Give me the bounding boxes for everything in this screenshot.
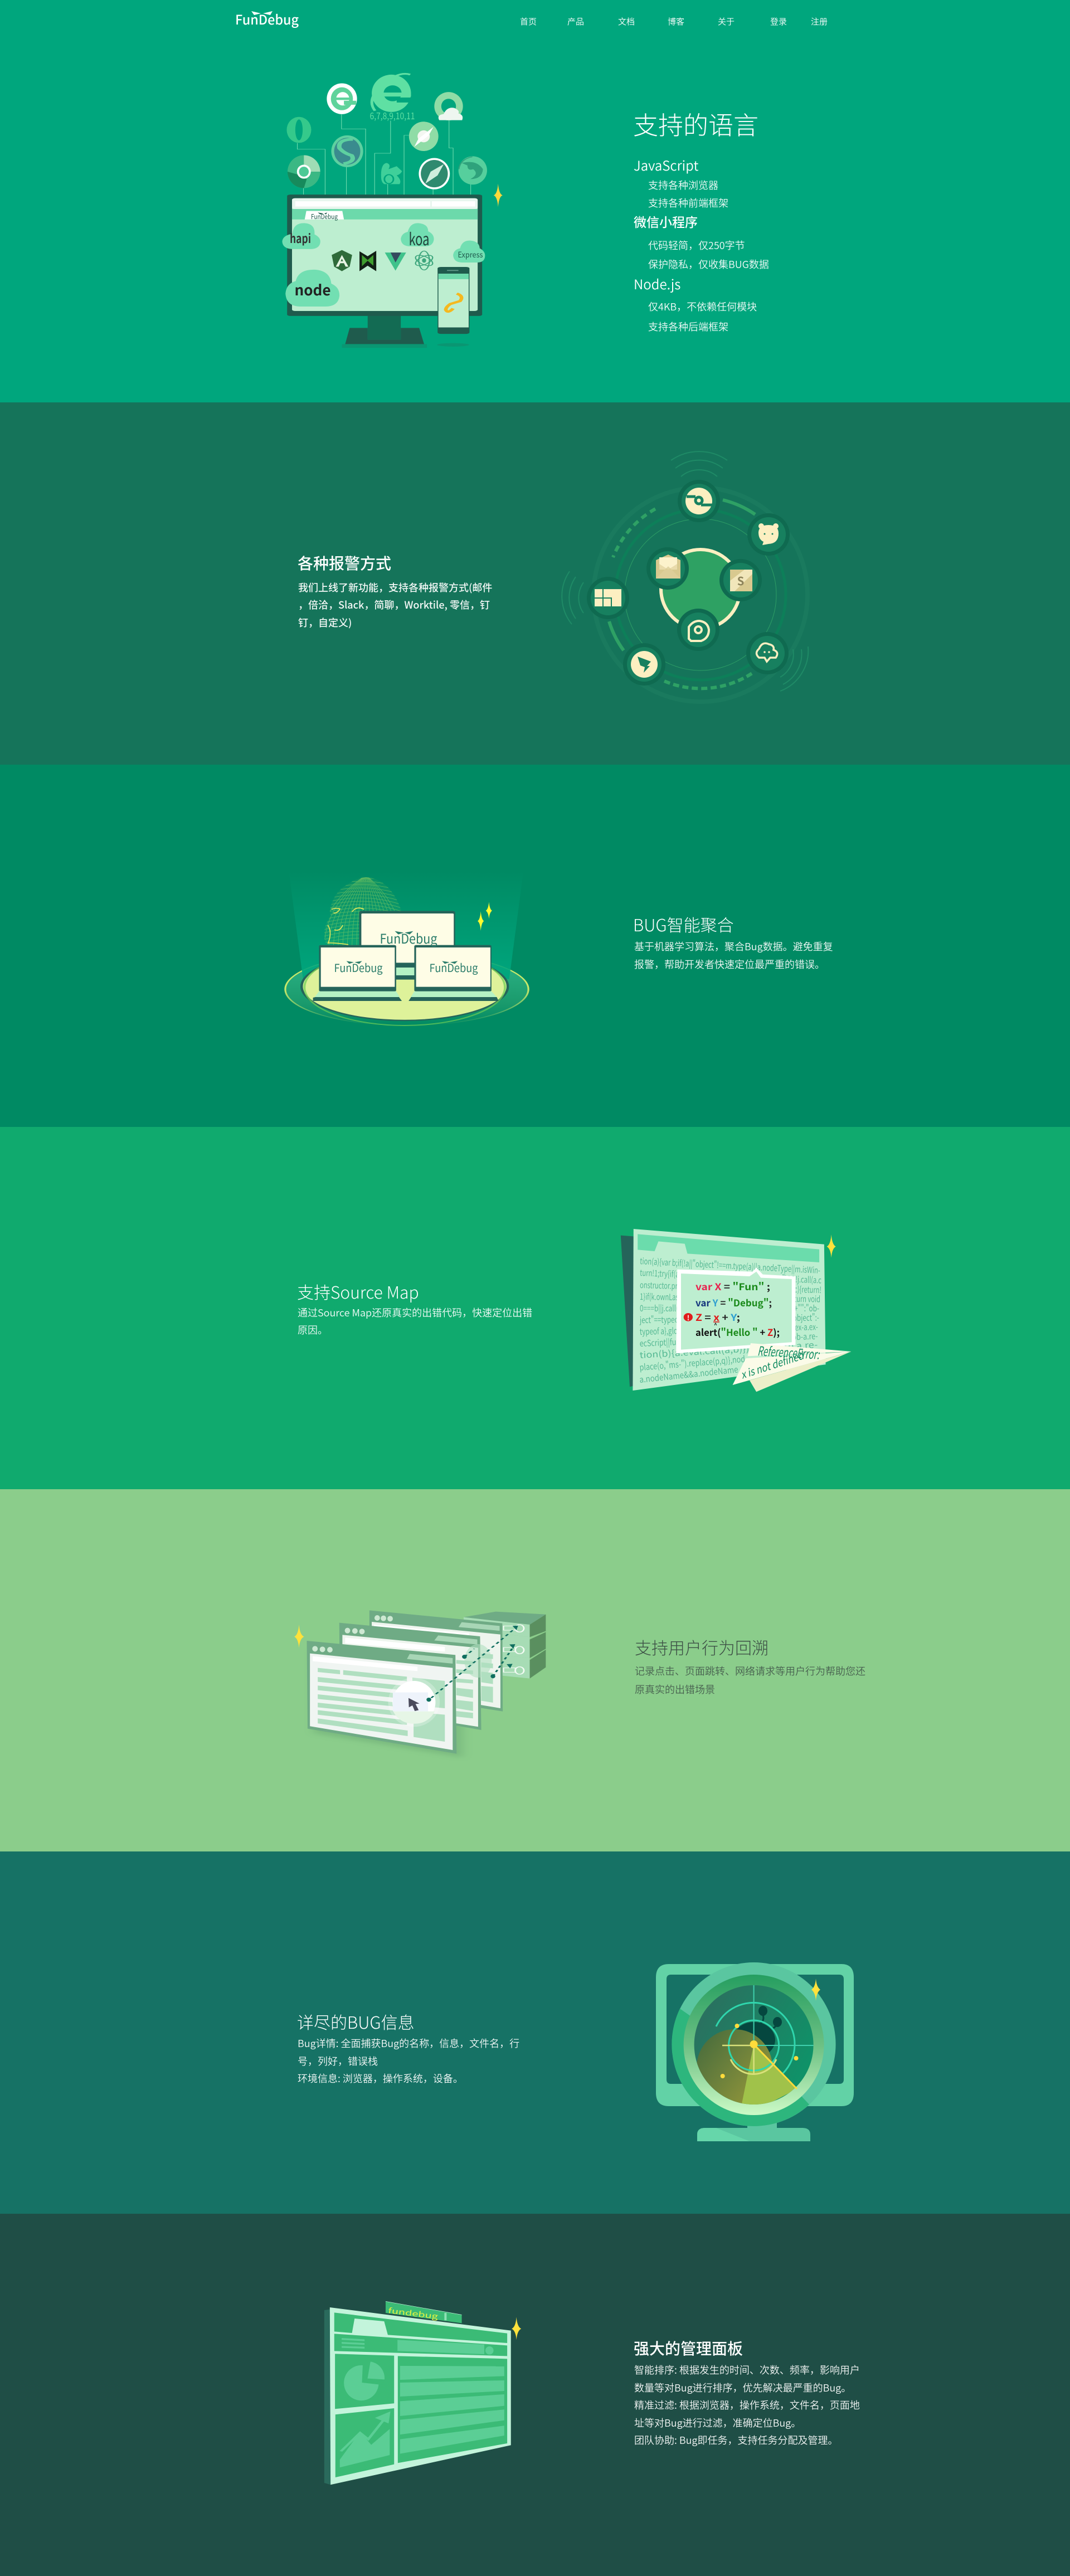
text block: language list: 保护隐私，仅收集BUG数据 (648, 257, 769, 271)
text block: source map description: 原因。 (298, 1323, 328, 1337)
illustration: source map code page with popup: ReferenceError: (757, 1340, 820, 1363)
illustration: source map code page with popup: ! (687, 1313, 689, 1323)
nav menu (520, 16, 828, 27)
illustration: source map code page with popup: onstructor.prototype,"isPrototypeOf"))return!1}catch(c){return! (640, 1279, 821, 1296)
illustration: three laptops on a platform (285, 871, 528, 1025)
text block: bug details (298, 2036, 519, 2086)
illustration: stacked browser windows and servers (294, 1610, 546, 1757)
nav menu: 登录 (770, 16, 787, 27)
heading: detailed bug info: 详尽的BUG信息 (297, 2009, 415, 2034)
illustration: three laptops on a platform: FunDebug (429, 959, 478, 975)
text block: language list: Node.js (634, 274, 680, 293)
illustration: dashboard page: fundebug (388, 2305, 439, 2321)
text block: language list: JavaScript (634, 155, 698, 174)
panel: source map (0, 1127, 1070, 1489)
icon: worktile (595, 589, 621, 606)
text block: dashboard features: 数量等对Bug进行排序，优先解决最严重的Bug。 (634, 2380, 851, 2395)
nav menu: 博客 (668, 16, 684, 27)
icon: envelope (656, 555, 680, 579)
illustration: monitor with browser icons: FunDebug (311, 212, 338, 221)
heading: bug aggregation: BUG智能聚合 (633, 912, 734, 936)
panel: detailed bug info (0, 1851, 1070, 2214)
nav menu: 产品 (567, 16, 584, 27)
panel: user behaviour replay (0, 1489, 1070, 1851)
illustration: source map code page with popup: tion(a){var b;if(!a||"object"!==m.type(a)||a.nodeType||m.isWin- (640, 1255, 820, 1276)
illustration: monitor with browser icons: 6,7,8,9,10,11 (370, 109, 415, 122)
icon: cloud chat (757, 643, 777, 662)
text block: source map description: 通过Source Map还原真实的出错代码，快速定位出错 (298, 1305, 532, 1320)
text block: behaviour description: 原真实的出错场景 (635, 1682, 715, 1697)
text block: bug details: 号，列好，错误栈 (298, 2053, 378, 2068)
illustration: source map code page with popup: ject"==typeof a||"function"==typeof a?h[i.call(a)]||"object":- (639, 1311, 819, 1326)
illustration: monitor with browser icons: koa (409, 226, 429, 250)
text block: language list: 微信小程序 (634, 212, 698, 231)
nav menu: 注册 (811, 16, 828, 27)
text block: source map description (298, 1305, 532, 1337)
nav menu: 首页 (520, 16, 537, 27)
heading: alert methods: 各种报警方式 (298, 552, 391, 574)
icon: S box: S (737, 572, 744, 589)
heading: user behaviour replay: 支持用户行为回溯 (635, 1635, 769, 1659)
diagram: radial alert channels (562, 451, 808, 702)
illustration: source map code page with popup: 1}if(k.ownLast)for(b in a)return j.call(a,b);for(b in a);return void (640, 1290, 820, 1305)
heading: source map: 支持Source Map (297, 1279, 419, 1304)
icon: dingtalk (631, 651, 658, 678)
text block: dashboard features (634, 2363, 860, 2447)
text block: behaviour description (635, 1664, 865, 1697)
illustration: source map code page with popup: alert("Hello " + Z); (696, 1325, 780, 1339)
text block: language list: 支持各种浏览器 (648, 178, 718, 192)
icon: bear (758, 523, 779, 545)
illustration: three laptops on a platform: FunDebug (380, 928, 437, 947)
heading: management dashboard: 强大的管理面板 (634, 2337, 743, 2359)
illustration: source map code page with popup: 0===b||j.call(a,b)},type:function(a){return null==a?a+"":"ob- (640, 1302, 819, 1314)
illustration: dashboard page (324, 2301, 521, 2485)
text block: behaviour description: 记录点击、页面跳转、网络请求等用户行为帮助您还 (635, 1664, 865, 1678)
icon: top channel (685, 488, 712, 514)
text block: aggregation description: 基于机器学习算法，聚合Bug数据。避免重复 (634, 939, 833, 954)
nav menu: 关于 (718, 16, 735, 27)
text block: language list: 支持各种后端框架 (648, 319, 728, 334)
illustration: source map code page with popup: a.nodeName&&a.nodeName (639, 1363, 739, 1386)
heading: supported languages: 支持的语言 (633, 105, 758, 142)
illustration: monitor with browser icons: Express (458, 249, 483, 260)
panel: management dashboard (0, 2214, 1070, 2576)
illustration: source map code page with popup: typeof a},globalEval:function(b){b&&m.trim(b)&&(a.ex-a.ex- (640, 1320, 818, 1338)
text block: dashboard features: 团队协助: Bug即任务，支持任务分配及管理。 (634, 2433, 838, 2447)
text block: alert description (298, 580, 492, 630)
illustration: source map code page with popup: ^ (714, 1320, 717, 1329)
text block: alert description: ，倍洽，Slack，简聊，Worktile, 零信，钉 (298, 597, 490, 612)
text block: dashboard features: 智能排序: 根据发生的时间、次数、频率，影响用户 (634, 2363, 860, 2377)
text block: bug details: 环境信息: 浏览器，操作系统，设备。 (298, 2071, 463, 2086)
icon: S box (730, 570, 752, 591)
illustration: wireframe face (324, 877, 401, 945)
text block: language list: 支持各种前端框架 (648, 196, 728, 210)
text block: dashboard features: 址等对Bug进行过滤，准确定位Bug。 (634, 2415, 801, 2430)
illustration: monitor with browser icons (282, 74, 503, 348)
illustration: source map code page with popup: place(o,"ms-").replace(p,q)},nod (639, 1353, 746, 1373)
nav menu: 文档 (618, 16, 635, 27)
illustration: radar monitor (656, 1962, 854, 2141)
panel: supported languages hero (0, 0, 1070, 402)
illustration: three laptops on a platform: FunDebug (334, 959, 382, 975)
text block: bug details: Bug详情: 全面捕获Bug的名称，信息，文件名，行 (298, 2036, 519, 2050)
text block: aggregation description: 报警，帮助开发者快速定位最严重的错误。 (634, 957, 825, 971)
illustration: source map code page with popup: tion(b){a.eval.call(a,b)})(b),return a.re- (639, 1338, 818, 1361)
text block: language list: 仅4KB，不依赖任何模块 (648, 299, 757, 314)
text block: alert description: 钉，自定义) (298, 615, 352, 630)
illustration: source map code page with popup: turn!1;try{if(a.constructor&&!j.call(a,"constructor")&&!j.call(a.c (640, 1266, 821, 1286)
panel: alert methods (0, 402, 1070, 765)
text block: alert description: 我们上线了新功能，支持各种报警方式(邮件 (298, 580, 492, 595)
illustration: source map code page with popup: x is not defined (739, 1347, 806, 1382)
logo: FunDebug (235, 9, 299, 28)
text block: dashboard features: 精准过滤: 根据浏览器，操作系统，文件名，页面地 (634, 2398, 860, 2412)
illustration: source map code page with popup (621, 1229, 852, 1392)
illustration: monitor with browser icons: node (294, 279, 331, 300)
illustration: source map code page with popup: Z = x + Y; (696, 1310, 740, 1324)
text block: language list: 代码轻简，仅250字节 (648, 238, 745, 252)
illustration: monitor with browser icons: hapi (290, 229, 311, 247)
illustration: source map code page with popup: ecScript||function(b){a.eval.call(a,b)})(b)},a+"":"ob-a.re- (639, 1330, 818, 1349)
panel: smart bug aggregation (0, 765, 1070, 1127)
text block: language list (634, 155, 769, 334)
text block: aggregation description (634, 939, 833, 971)
illustration: source map code page with popup: var X = "Fun" ; (696, 1279, 770, 1293)
icon: bottom channel (689, 621, 709, 641)
illustration: source map code page with popup: var Y = "Debug"; (696, 1295, 772, 1309)
